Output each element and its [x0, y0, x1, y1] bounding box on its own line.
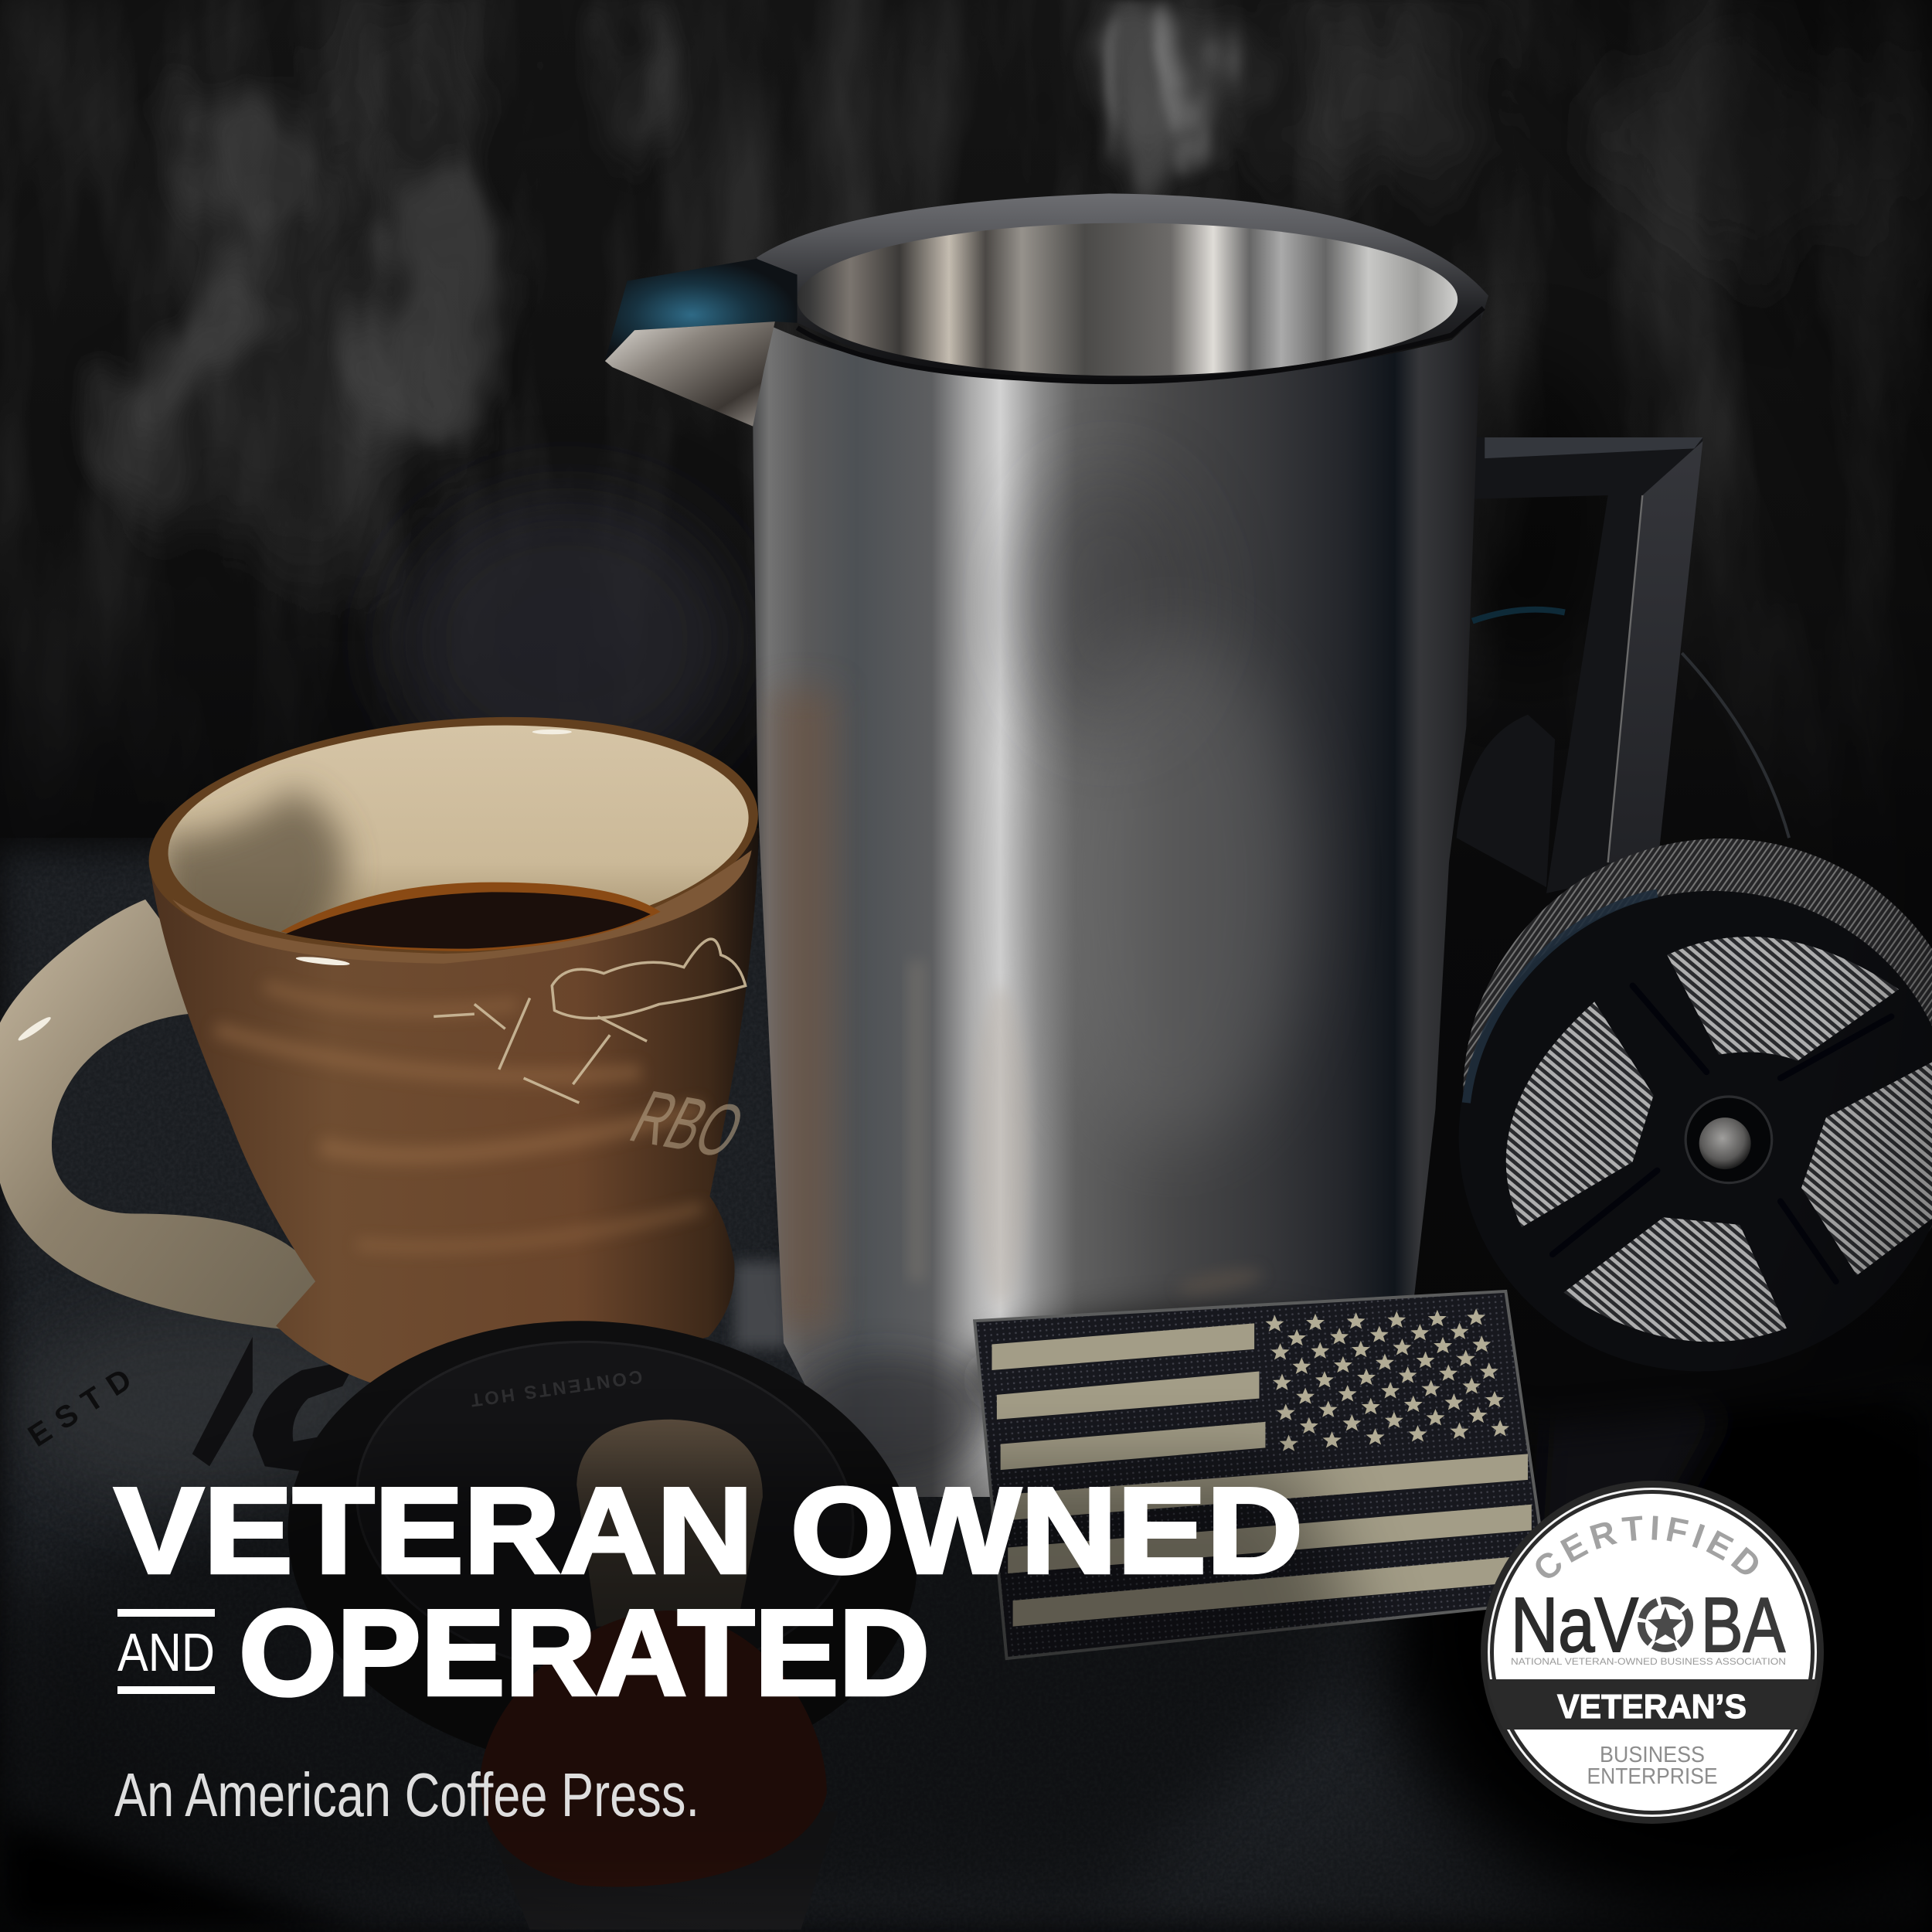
plunger filter disc — [1391, 767, 1932, 1440]
scoop handle — [577, 1420, 763, 1627]
carafe opening — [798, 223, 1458, 376]
title — [114, 1463, 1303, 1721]
badge certified arc text — [1536, 1516, 1758, 1578]
mug highlights — [16, 730, 572, 1043]
american flag patch — [975, 1291, 1548, 1658]
cloth under objects — [0, 838, 1699, 1932]
badge veteran's: VETERAN’S — [1557, 1688, 1747, 1726]
carafe body — [746, 308, 1485, 1503]
mesh rim — [1392, 767, 1932, 1414]
carafe spout — [605, 259, 798, 427]
dark shading under title — [0, 1466, 1368, 1910]
badge association line: NATIONAL VETERAN-OWNED BUSINESS ASSOCIATION — [1511, 1658, 1786, 1667]
travel lid — [265, 1291, 940, 1802]
mug front lip — [172, 850, 752, 964]
mug handle — [0, 900, 318, 1331]
badge rings — [1481, 1481, 1824, 1824]
carafe — [605, 193, 1488, 1503]
badge business enterprise: ENTERPRISE — [1587, 1764, 1717, 1789]
badge business enterprise: BUSINESS — [1600, 1743, 1705, 1767]
word: and: AND — [117, 1622, 215, 1682]
coffee mug — [0, 693, 768, 1387]
carafe rim — [757, 193, 1488, 383]
badge star ring icon — [1641, 1600, 1689, 1648]
flag stars — [1265, 1308, 1509, 1451]
center hub — [1685, 1097, 1772, 1183]
engraved plane — [434, 939, 746, 1103]
badge certified arc text: CERTIFIED — [1536, 1516, 1758, 1578]
mug interior — [160, 715, 764, 974]
smoke and steam — [0, 0, 1932, 705]
word: and — [117, 1609, 215, 1694]
flag stripes — [992, 1323, 1532, 1627]
lid embossing: CONTENTS HOT — [467, 1366, 644, 1410]
title line one: VETERAN OWNED — [114, 1463, 1303, 1599]
dark cloth behind carafe — [394, 357, 1614, 788]
carafe lip shadow — [798, 308, 1484, 382]
coffee grounds — [481, 1611, 827, 1887]
badge band — [1468, 1679, 1836, 1730]
engraved letters: RBO — [618, 1076, 757, 1173]
badge business enterprise — [1587, 1743, 1717, 1789]
scoop with coffee grounds — [481, 1420, 838, 1930]
mesh wedges — [1506, 937, 1932, 1342]
cloth logo — [22, 1337, 357, 1472]
title line two: OPERATED — [239, 1585, 930, 1721]
coffee surface — [281, 883, 661, 951]
logo estd text: ESTD — [22, 1356, 147, 1454]
badge BA letters: BA — [1701, 1582, 1785, 1668]
badge: NaVOBA certified — [1481, 1481, 1824, 1824]
mug rim — [138, 693, 768, 982]
subtitle: An American Coffee Press. — [114, 1760, 699, 1829]
mug body — [151, 828, 759, 1387]
mug glaze streaks — [216, 986, 702, 1247]
carafe handle — [1457, 437, 1789, 893]
disc front — [1391, 821, 1932, 1440]
scoop cup — [487, 1811, 838, 1930]
spoke grooves — [1553, 986, 1891, 1281]
badge NaV letters: NaV — [1511, 1582, 1638, 1668]
